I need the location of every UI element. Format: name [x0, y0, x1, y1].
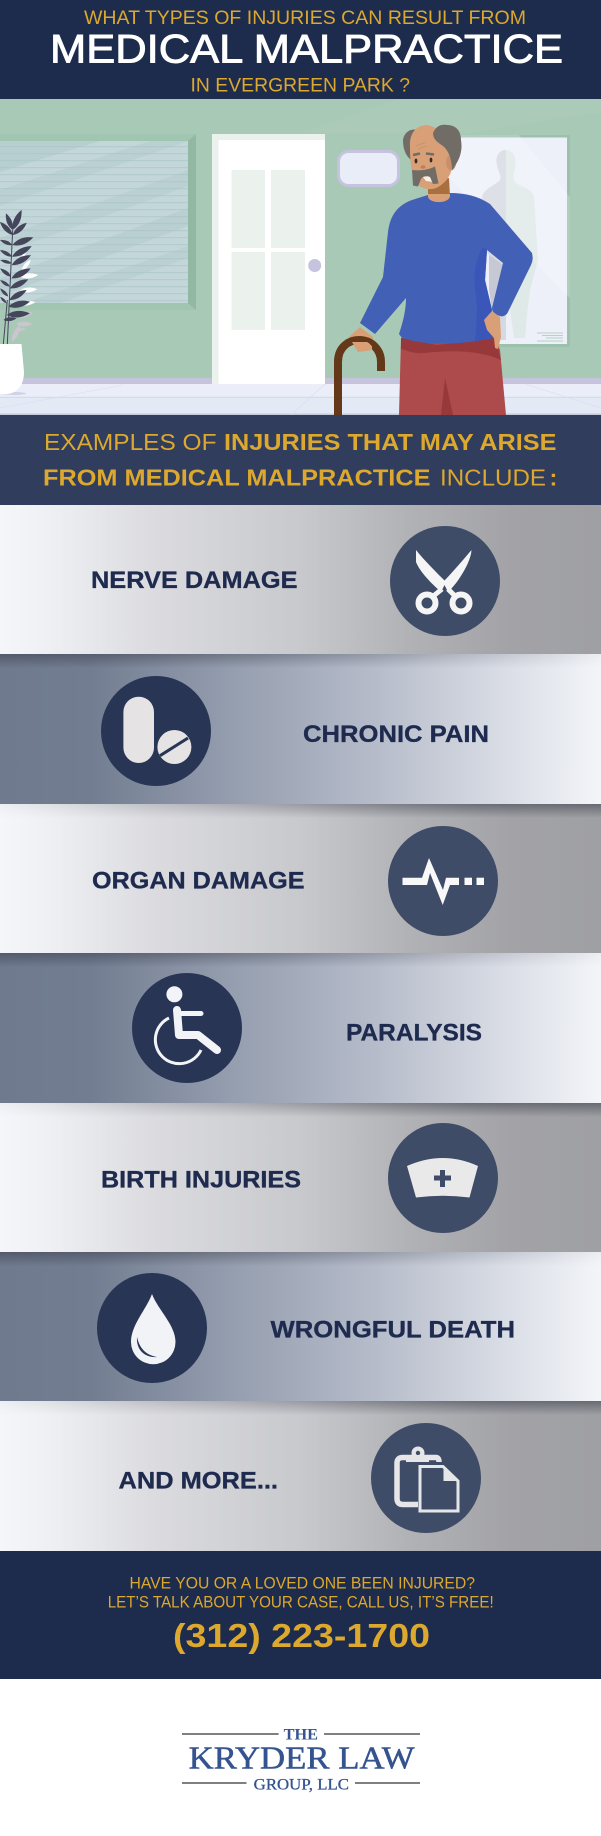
icon: nurse cap [388, 1123, 498, 1233]
call to action line two: LET’S TALK ABOUT YOUR CASE, CALL US, IT’S FREE! [108, 1592, 494, 1612]
panel: call to action footer [0, 1551, 601, 1679]
title: location line: IN EVERGREEN PARK ? [190, 74, 410, 96]
heading line two: INCLUDE [440, 465, 546, 491]
panel: paralysis [0, 953, 601, 1103]
hair back [403, 130, 417, 160]
heading line one: INJURIES THAT MAY ARISE [224, 429, 556, 455]
label: chronic pain: CHRONIC PAIN [303, 721, 489, 748]
plant in white pot [0, 209, 38, 395]
panel: birth injuries [0, 1103, 601, 1252]
neck [428, 178, 450, 202]
panel: examples heading band [0, 415, 601, 505]
logo: The Kryder Law Group, LLC: THE [284, 1726, 318, 1743]
title: main heading: MEDICAL MALPRACTICE [50, 27, 563, 71]
cane and gripping hand [338, 327, 381, 415]
panel: organ damage [0, 804, 601, 953]
icon: scissors [390, 526, 500, 636]
icon: wheelchair [132, 973, 242, 1083]
icon: blood drop [97, 1273, 207, 1383]
label: wrongful death: WRONGFUL DEATH [270, 1317, 515, 1344]
icon: pills [101, 676, 211, 786]
title: intro line: WHAT TYPES OF INJURIES CAN RESULT FROM [84, 7, 526, 29]
logo: The Kryder Law Group, LLC: KRYDER LAW [189, 1740, 415, 1776]
elderly man with cane [338, 125, 533, 415]
right hand on hip [484, 311, 501, 349]
label: birth injuries: BIRTH INJURIES [101, 1167, 301, 1194]
panel: and more [0, 1401, 601, 1551]
label: nerve damage: NERVE DAMAGE [91, 567, 298, 594]
trousers [399, 330, 506, 415]
wall sign [338, 152, 398, 186]
anatomy poster [446, 135, 570, 347]
label: and more: AND MORE... [118, 1468, 278, 1495]
panel: header [0, 0, 601, 99]
blue sweater [360, 193, 533, 344]
logo: The Kryder Law Group, LLC [182, 1726, 420, 1793]
heading line two: FROM MEDICAL MALPRACTICE [43, 465, 431, 491]
phone number: (312) 223-1700 [173, 1617, 430, 1654]
heading line two [43, 465, 557, 491]
logo: The Kryder Law Group, LLC: GROUP, LLC [254, 1776, 349, 1793]
window with blinds [0, 134, 196, 310]
panel: wrongful death [0, 1252, 601, 1401]
label: paralysis: PARALYSIS [346, 1020, 482, 1047]
heading line two: : [550, 465, 557, 491]
head and face [410, 125, 462, 189]
heading line one [44, 429, 556, 455]
heading line one: EXAMPLES OF [44, 429, 216, 455]
panel: nerve damage [0, 505, 601, 654]
icon: clipboard and document [371, 1423, 481, 1533]
call to action line one: HAVE YOU OR A LOVED ONE BEEN INJURED? [130, 1574, 475, 1593]
door [212, 134, 325, 384]
panel: chronic pain [0, 654, 601, 804]
label: organ damage: ORGAN DAMAGE [92, 868, 304, 895]
icon: heartbeat pulse [388, 826, 498, 936]
illustration: clinic scene with elderly patient [0, 99, 601, 415]
